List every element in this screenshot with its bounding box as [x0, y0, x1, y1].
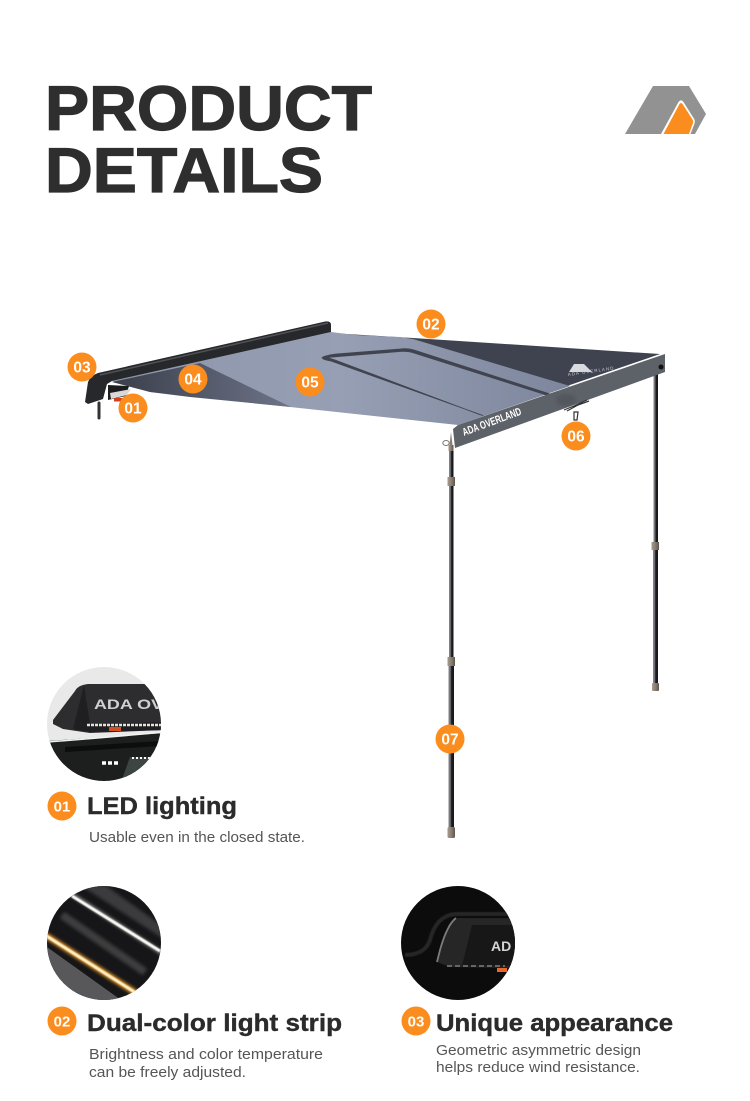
- feature 03: unique appearance: [402, 1006, 673, 1076]
- number badge 01: [118, 394, 148, 422]
- fabric logo: ADA OVERLAND: [567, 366, 614, 377]
- number badge 04: [178, 364, 208, 394]
- number badge 07: 07: [441, 732, 459, 748]
- feature 01: LED lighting: [48, 792, 305, 846]
- front bar brand text: ADA OVERLAND: [461, 406, 523, 439]
- number badge 06: 06: [567, 428, 585, 446]
- fabric inset lines: [322, 349, 550, 416]
- number badge 07: [436, 724, 464, 754]
- roller rail: [85, 321, 331, 404]
- LED end detail: [108, 385, 129, 400]
- feature 01: LED lighting: 01: [54, 798, 70, 816]
- feature 02: dual-color light strip: Dual-color light strip: [87, 1010, 342, 1037]
- number badge 03: [68, 352, 96, 382]
- feature 02: dual-color light strip: 02: [54, 1014, 70, 1030]
- dark triangle panel: [112, 363, 291, 407]
- number badge 04: 04: [184, 372, 202, 388]
- rail end hook: [98, 403, 100, 418]
- number badge 02: 02: [422, 316, 440, 334]
- rear pole: [652, 372, 659, 691]
- title: DETAILS: [45, 136, 323, 206]
- dark fabric shadow panel: [330, 333, 660, 386]
- photo: unique appearance: AD: [491, 938, 511, 954]
- photo: unique appearance: [401, 886, 520, 1000]
- number badge 05: [296, 368, 324, 396]
- number badge 01: 01: [124, 400, 142, 418]
- feature 01: LED lighting: LED lighting: [87, 793, 237, 820]
- title: [45, 74, 372, 206]
- number badge 03: 03: [73, 360, 91, 376]
- light fabric: [112, 332, 570, 425]
- feature 02: dual-color light strip: [48, 1006, 342, 1081]
- feature 02: dual-color light strip: can be freely adjusted.: [89, 1065, 246, 1081]
- photo: dual-color light strip: [47, 886, 161, 1000]
- feature 01: LED lighting: Usable even in the closed state.: [89, 830, 305, 846]
- number badge 06: [562, 422, 590, 450]
- feature 02: dual-color light strip: Brightness and color temperature: [89, 1047, 323, 1063]
- number badge 02: [416, 310, 446, 338]
- icon: brand logo: [625, 86, 706, 134]
- awning product illustration: [85, 321, 665, 838]
- photo: LED lighting: [47, 667, 165, 785]
- front bar: [453, 354, 665, 448]
- feature 03: unique appearance: 03: [408, 1014, 424, 1030]
- photo: LED lighting: ADA OV: [94, 696, 164, 712]
- feature 03: unique appearance: Geometric asymmetric design: [436, 1043, 641, 1059]
- feature 03: unique appearance: Unique appearance: [436, 1010, 673, 1037]
- bar clip: [564, 400, 589, 420]
- front pole: [443, 432, 455, 838]
- title: PRODUCT: [45, 74, 372, 144]
- feature 03: unique appearance: helps reduce wind resistance.: [436, 1060, 640, 1076]
- number badge 05: 05: [301, 374, 319, 392]
